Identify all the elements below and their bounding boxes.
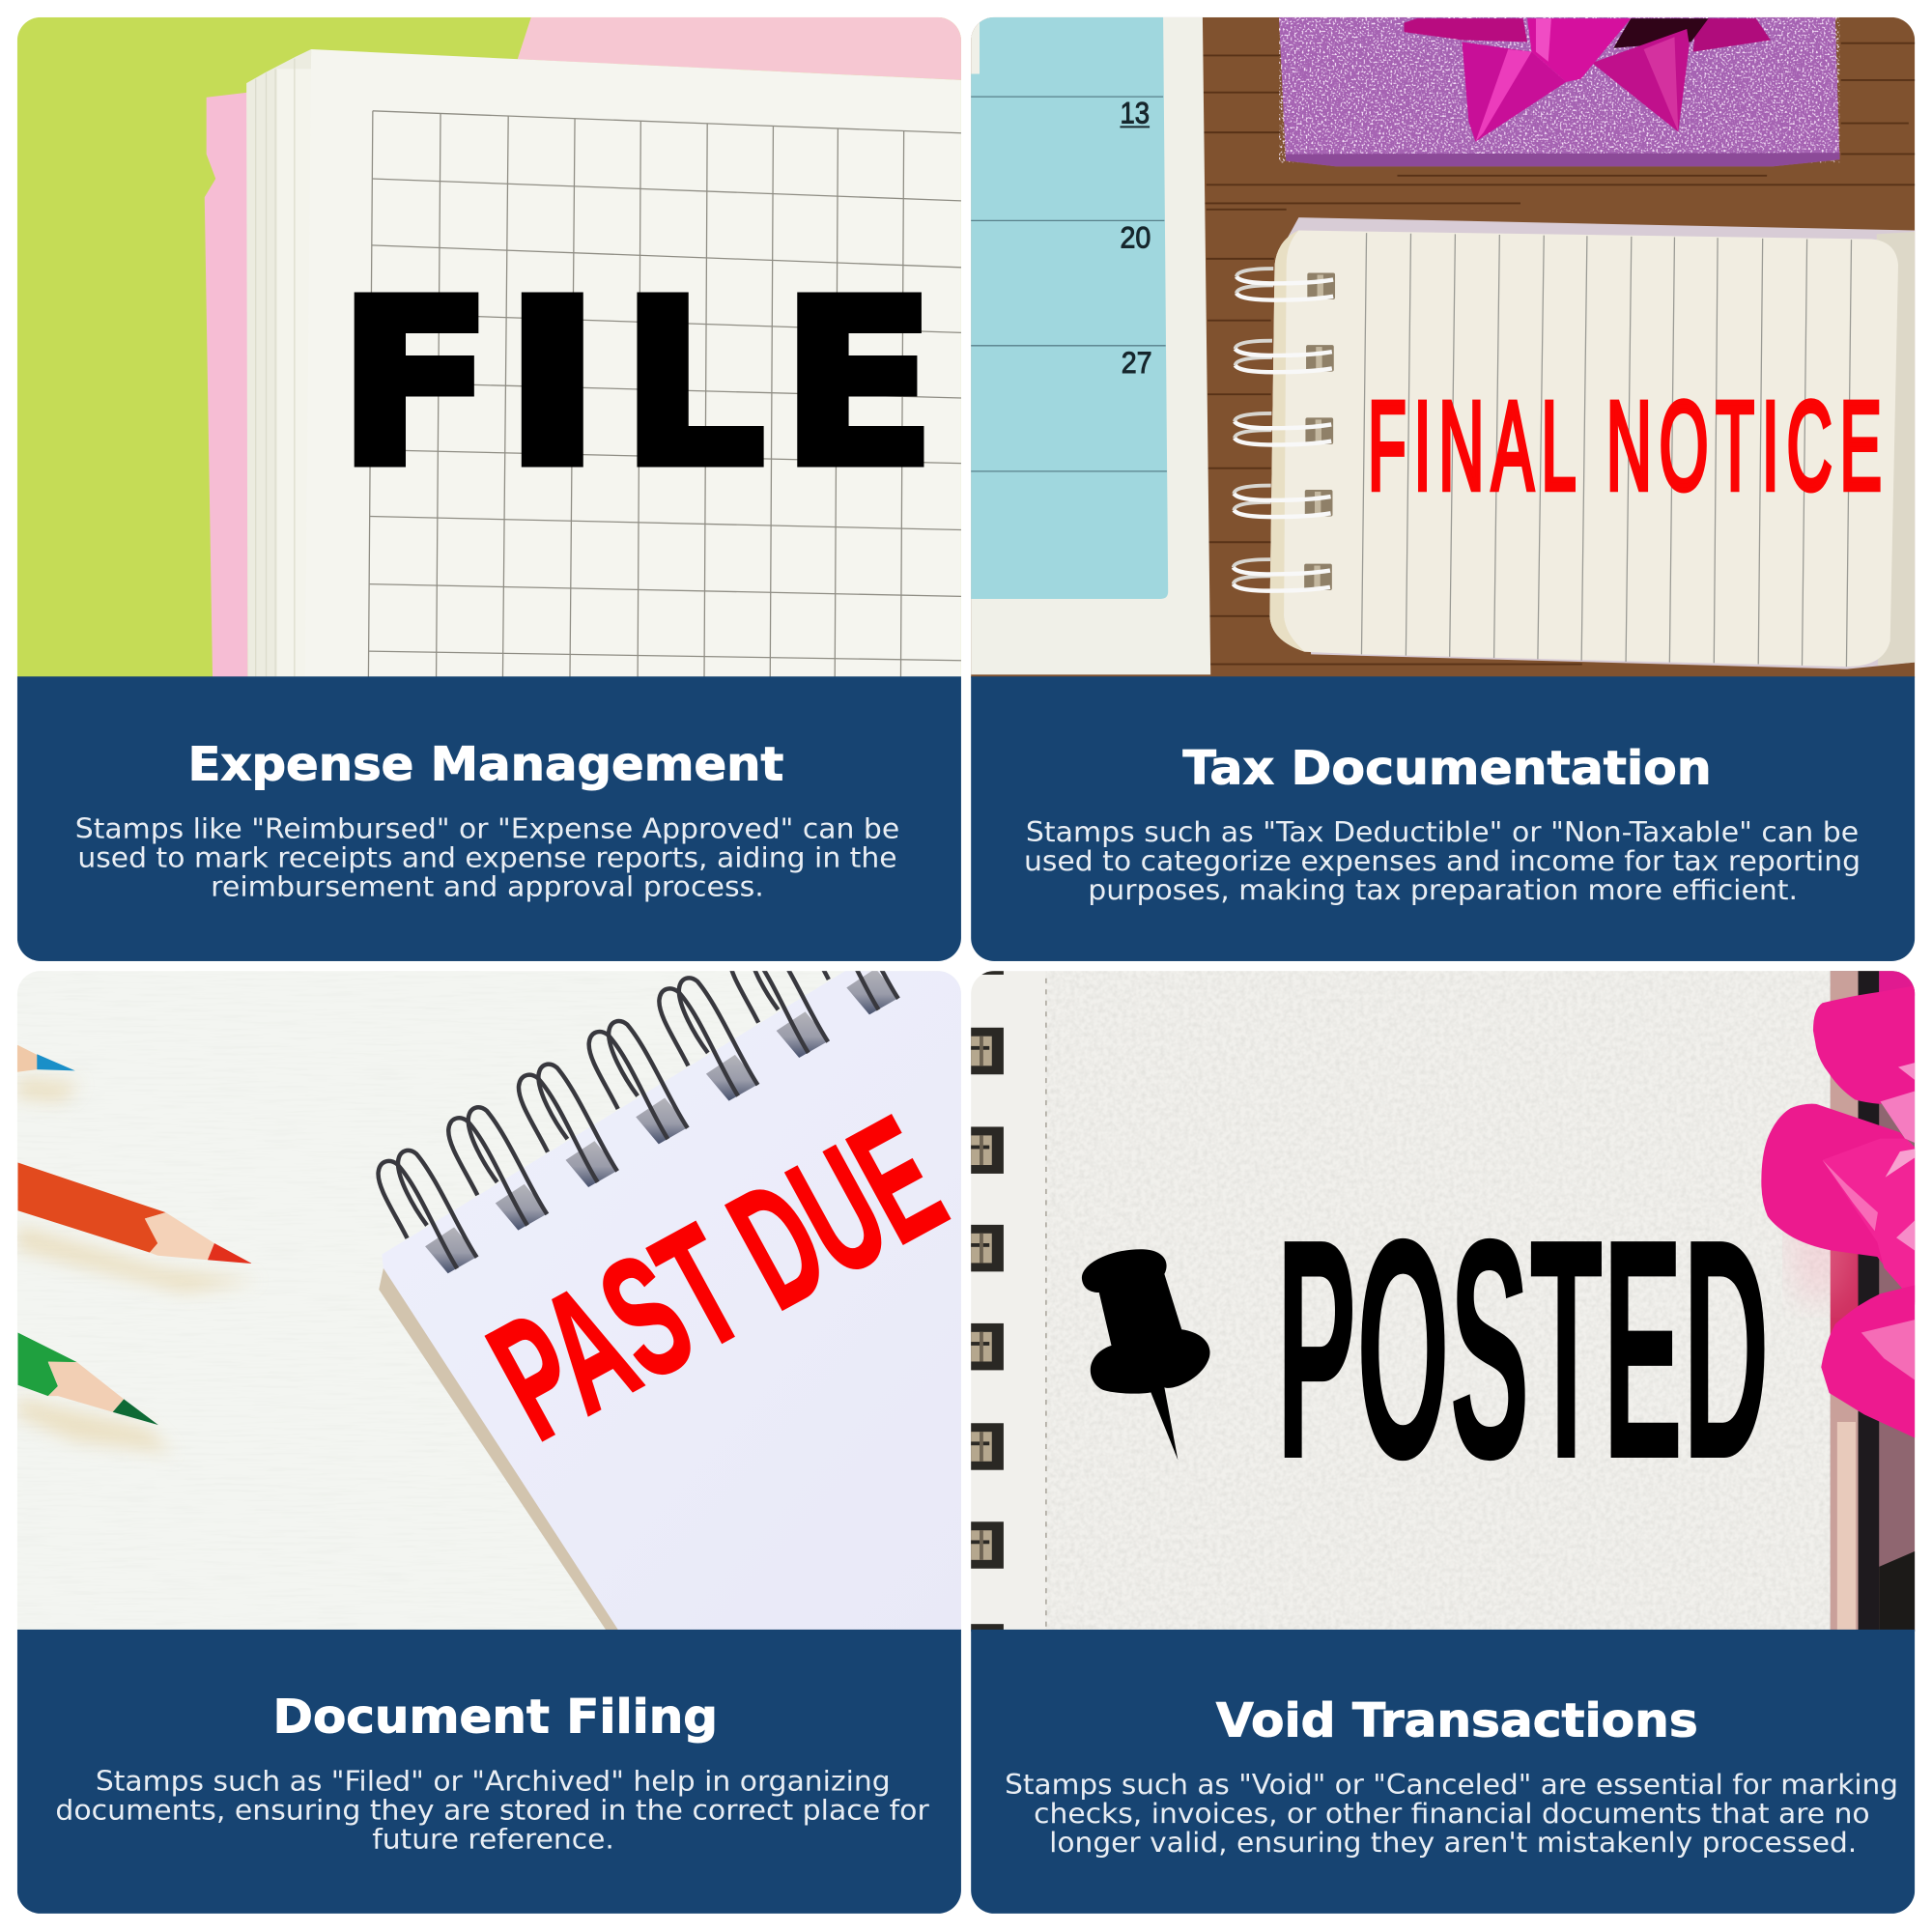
planner edge	[1831, 971, 1915, 1632]
description	[1024, 816, 1861, 906]
calendar	[971, 17, 1210, 674]
caption band	[971, 676, 1915, 961]
stamp text: FILE: F	[338, 251, 494, 517]
photo: notebook with FILE stamp	[17, 17, 961, 678]
stamp text: FILE: E	[781, 251, 936, 517]
panel: document filing	[17, 892, 971, 1915]
description: future reference.	[372, 1823, 614, 1855]
spiral notepad	[1234, 217, 1915, 669]
description: Stamps like "Reimbursed" or "Expense Approved" can be	[75, 812, 899, 844]
calendar: 27	[1122, 345, 1152, 380]
description: Stamps such as "Tax Deductible" or "Non-Taxable" can be	[1026, 816, 1859, 848]
description: purposes, making tax preparation more efficient.	[1088, 874, 1798, 906]
heading: Void Transactions	[1216, 1693, 1698, 1747]
description: reimbursement and approval process.	[211, 870, 764, 902]
heading: Tax Documentation	[1183, 741, 1712, 795]
heading: Expense Management	[188, 737, 783, 791]
photo: pencils and spiral notepad	[17, 971, 961, 1630]
description: longer valid, ensuring they aren't mistakenly processed.	[1049, 1827, 1857, 1859]
spiral holes	[971, 971, 1004, 1632]
panel: expense management	[17, 17, 961, 961]
description: used to categorize expenses and income for tax reporting	[1024, 845, 1861, 877]
description	[75, 812, 899, 902]
stamp text: FILE	[354, 292, 923, 468]
gift box with bow	[1279, 17, 1839, 166]
description: Stamps such as "Filed" or "Archived" help in organizing	[96, 1765, 891, 1797]
calendar: 20	[1120, 219, 1151, 254]
panel: tax documentation	[971, 17, 1915, 961]
calendar: 13	[1120, 96, 1150, 130]
photo: desk with calendar, gift and notebook	[971, 17, 1915, 678]
blue pencil	[17, 1045, 75, 1072]
stamp text: FILE: I	[501, 252, 604, 517]
stamp text: FINAL NOTICE: FINAL NOTICE	[1368, 375, 1889, 516]
description: used to mark receipts and expense reports, aiding in the	[77, 841, 897, 873]
description: checks, invoices, or other financial documents that are no	[1034, 1798, 1870, 1830]
green pencil	[17, 1332, 158, 1425]
description	[57, 1770, 929, 1849]
caption band	[17, 1630, 961, 1915]
panel: void transactions	[971, 971, 1915, 1915]
caption band	[17, 676, 961, 961]
red pencil	[17, 1162, 252, 1264]
heading: Document Filing	[273, 1690, 718, 1744]
pencil shadows	[17, 1077, 259, 1453]
notepad	[376, 971, 961, 1630]
flowers	[1761, 985, 1915, 1438]
description: Stamps such as "Void" or "Canceled" are essential for marking	[1005, 1769, 1898, 1801]
stamp text: PAST DUE: PAST DUE	[462, 1080, 971, 1476]
description: documents, ensuring they are stored in the correct place for	[55, 1794, 929, 1826]
photo: textured notebook and flowers	[971, 971, 1915, 1632]
caption band	[971, 1630, 1915, 1915]
description	[1005, 1769, 1898, 1859]
icon: push pin	[1082, 1249, 1210, 1461]
stamp text: FILE: L	[620, 251, 766, 517]
